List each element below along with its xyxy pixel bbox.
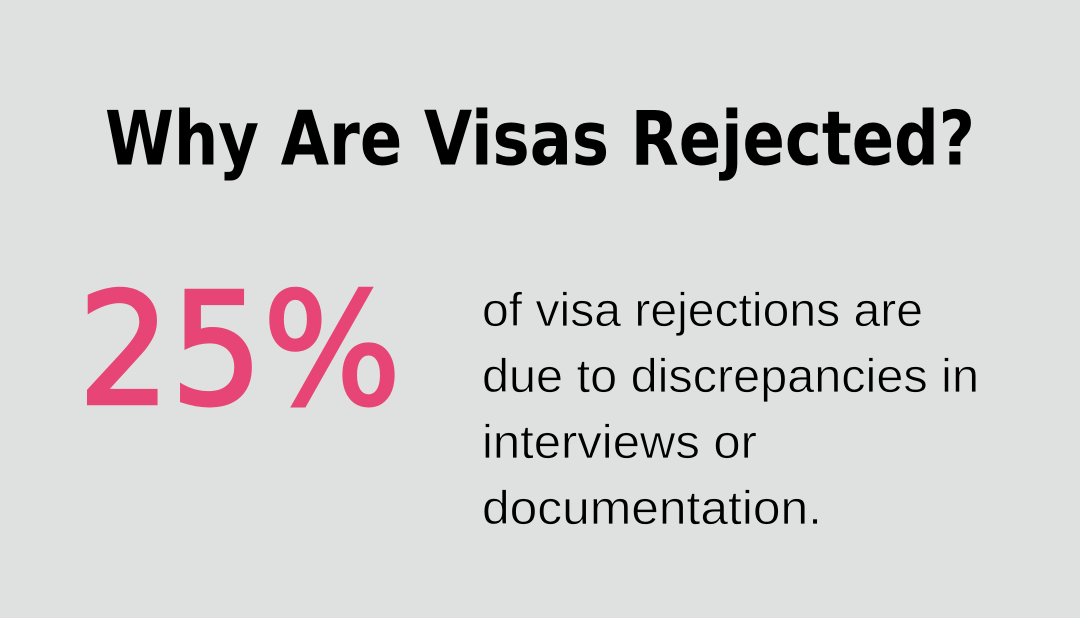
description text block: due to discrepancies in: [482, 349, 979, 402]
description text block: of visa rejections are: [482, 283, 923, 336]
description text block: interviews or: [482, 415, 757, 468]
description text block: documentation.: [482, 481, 822, 534]
big statistic: 25%: 25%: [78, 260, 401, 440]
description text block: [482, 283, 979, 534]
